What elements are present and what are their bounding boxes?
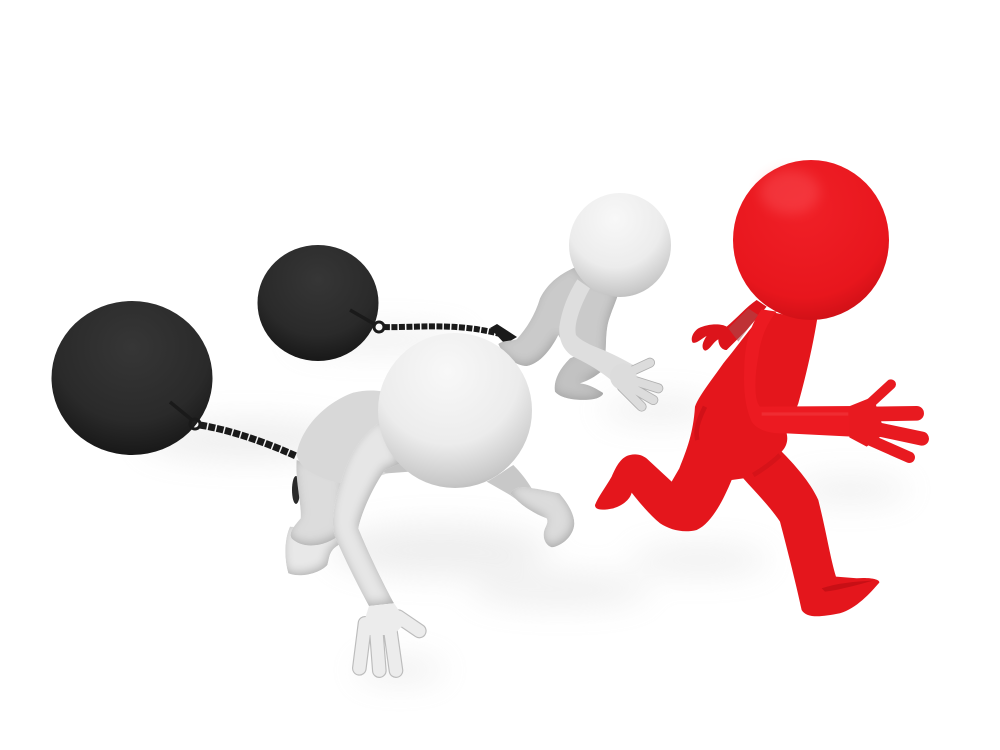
palm — [610, 363, 637, 390]
back ball and chain — [258, 245, 517, 361]
iron ball: front — [52, 301, 212, 455]
palm — [360, 603, 407, 635]
floor shadows — [140, 328, 910, 682]
crease: torso — [697, 407, 705, 440]
body and legs — [595, 311, 879, 616]
red hand — [849, 384, 922, 457]
foot shade — [822, 581, 873, 592]
arm highlight — [762, 409, 848, 419]
head highlight — [760, 170, 820, 214]
white figure: back — [498, 267, 658, 407]
shackle: back — [490, 324, 517, 344]
torso and far arm — [498, 267, 618, 366]
far leg and foot — [555, 350, 607, 400]
head: front figure — [378, 333, 532, 488]
back hand and arm — [692, 300, 767, 351]
chest under head — [380, 430, 410, 473]
red figure — [595, 160, 922, 616]
iron ball: back — [258, 245, 378, 361]
near hand — [359, 603, 419, 671]
head: red figure — [733, 160, 889, 320]
crease: hip — [753, 455, 780, 475]
hind foot — [285, 527, 342, 575]
head: back figure — [569, 193, 671, 297]
reflection: back arm — [728, 308, 758, 342]
shackle: front — [292, 476, 300, 504]
chain: back — [350, 310, 500, 334]
hand — [610, 363, 658, 407]
front ball and chain — [52, 301, 296, 456]
far hand — [511, 487, 574, 547]
chain: front — [170, 402, 296, 456]
hind leg — [291, 460, 345, 545]
torso and hip — [297, 390, 403, 483]
near arm — [333, 420, 400, 606]
near arm — [559, 279, 633, 383]
near arm — [744, 309, 857, 437]
white figure: front — [285, 390, 574, 671]
palm — [849, 397, 885, 447]
far arm — [487, 465, 543, 517]
